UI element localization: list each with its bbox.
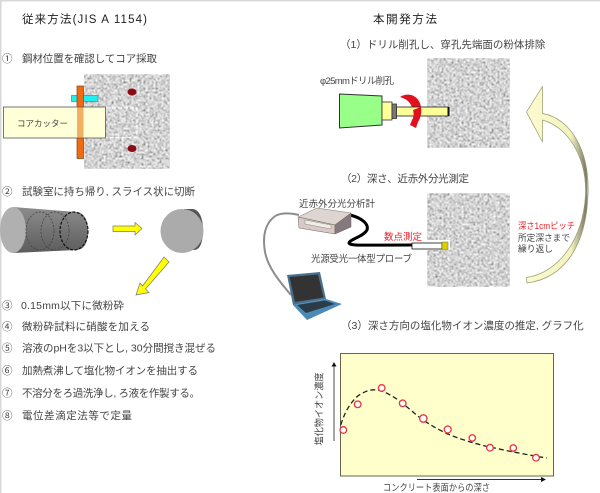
drilled hole: [427, 240, 450, 250]
rotation arrow, rear part: [400, 95, 421, 108]
plot area: [340, 354, 554, 476]
repeat note: [518, 221, 575, 254]
probe label: 光源受光一体型プローブ: [311, 253, 412, 265]
concrete block 2: [427, 58, 510, 148]
rotation arrow, front part: [410, 107, 421, 128]
steps 3 to 8: ④: [2, 321, 13, 333]
steps 3 to 8: [2, 299, 216, 422]
core cutter label: コアカッター: [17, 118, 68, 128]
steps 3 to 8: 微粉砕試料に硝酸を加える: [22, 320, 150, 333]
cyan rebar detector: [72, 96, 98, 102]
fitted curve: [341, 390, 547, 458]
step (1) text: （1）ドリル削孔し、穿孔先端面の粉体排除: [340, 38, 546, 51]
steps 3 to 8: 加熱煮沸して塩化物イオンを抽出する: [22, 364, 198, 377]
concrete block 3: [427, 193, 510, 287]
chart: chloride concentration vs depth: [314, 354, 554, 493]
dashed core outline: [100, 108, 137, 138]
step 1 text: 鋼材位置を確認してコア採取: [22, 52, 158, 65]
measurement label: 数点測定: [384, 231, 423, 243]
step 2 text: 試験室に持ち帰り, スライス状に切断: [22, 185, 196, 198]
steps 3 to 8: ⑧: [2, 410, 13, 422]
steps 3 to 8: ⑤: [2, 342, 13, 354]
drill label: φ25mmドリル削孔: [320, 75, 394, 87]
orange plate seen through cutter: [77, 108, 84, 138]
y axis label: 塩化物イオン濃度: [314, 372, 326, 446]
steps 3 to 8: 電位差滴定法等で定量: [22, 409, 132, 422]
drill bit: [396, 107, 448, 116]
arrow: right: [113, 222, 142, 235]
heading: new method: 本開発方法: [373, 12, 438, 26]
drill collar: [382, 102, 392, 120]
cylinder end face: [0, 207, 26, 253]
drill body: [340, 94, 382, 128]
figure: core sampling: [4, 74, 170, 169]
steps 3 to 8: 溶液のpHを3以下とし, 30分間撹き混ぜる: [22, 342, 216, 354]
steps 3 to 8: ③: [2, 300, 13, 312]
spectrometer: [298, 208, 351, 234]
cylinder body: [13, 207, 88, 253]
figure: sliced disc: [160, 209, 204, 253]
black probe cable: [349, 215, 412, 245]
step 1 text: ①: [2, 53, 13, 65]
steel bar marks: [128, 88, 136, 152]
arrow: diagonal: [136, 257, 169, 295]
curved return arrow: [526, 86, 588, 283]
steps 3 to 8: ⑥: [2, 365, 13, 377]
figure: NIR measurement: [264, 193, 510, 320]
step 2 text: ②: [2, 186, 13, 198]
repeat note: 所定深さまで: [518, 232, 570, 243]
repeat note: 繰り返し: [518, 243, 553, 254]
grey cable to laptop: [264, 213, 299, 295]
heading: conventional method: 従来方法(JIS A 1154): [22, 12, 147, 26]
probe: [412, 243, 442, 249]
repeat note: 深さ1cmピッチ: [518, 221, 575, 231]
step (3) text: （3）深さ方向の塩化物イオン濃度の推定, グラフ化: [341, 319, 584, 332]
steps 3 to 8: ⑦: [2, 388, 13, 400]
laptop: [287, 272, 342, 320]
figure: drilling: [320, 58, 510, 148]
step (2) text: （2）深さ、近赤外分光測定: [341, 172, 470, 185]
y axis arrow: [333, 366, 335, 441]
steps 3 to 8: 不溶分をろ過洗浄し, ろ液を作製する。: [22, 386, 200, 400]
concrete block 1: [84, 74, 170, 169]
steps 3 to 8: 0.15mm以下に微粉砕: [21, 299, 124, 312]
orange plate: [77, 86, 84, 158]
figure: core cylinder with slices: [0, 207, 88, 253]
core cutter: [4, 107, 106, 138]
data points: [340, 385, 539, 461]
x axis arrow: [417, 478, 542, 480]
spectrometer label: 近赤外分光分析計: [299, 198, 376, 210]
cut line: [60, 212, 88, 250]
slice outlines: [26, 212, 69, 250]
